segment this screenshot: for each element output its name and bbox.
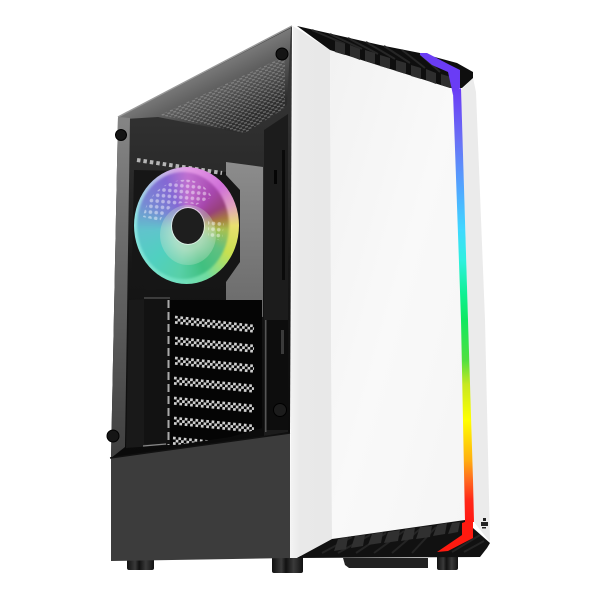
fan hub (172, 208, 204, 244)
fan inner disc (137, 172, 229, 279)
right white side strip (461, 78, 490, 542)
rear wall right column (264, 114, 288, 436)
rgb fan (134, 167, 239, 284)
fan perforation dots (143, 180, 224, 241)
glass top edge (118, 26, 292, 117)
rgb light strip (420, 53, 474, 552)
drive bay (126, 298, 170, 448)
bottom black vents (297, 520, 490, 558)
side glass panel (111, 26, 292, 458)
fan centre glow (160, 205, 216, 265)
top black vents (297, 26, 473, 88)
brand logo (481, 518, 488, 528)
fan mount frame (132, 170, 240, 290)
pc case body (106, 26, 490, 573)
drive bracket (226, 162, 263, 317)
feet (127, 555, 458, 573)
ceiling mesh (119, 28, 291, 134)
vent dots above fan (137, 160, 222, 173)
lower front panel (111, 433, 290, 561)
thumb screws (107, 48, 288, 442)
fan outer rim (134, 167, 239, 284)
main white front panel (330, 50, 465, 539)
left white bevel (290, 26, 332, 558)
left glass frame (111, 117, 130, 458)
expansion slots (170, 300, 264, 451)
